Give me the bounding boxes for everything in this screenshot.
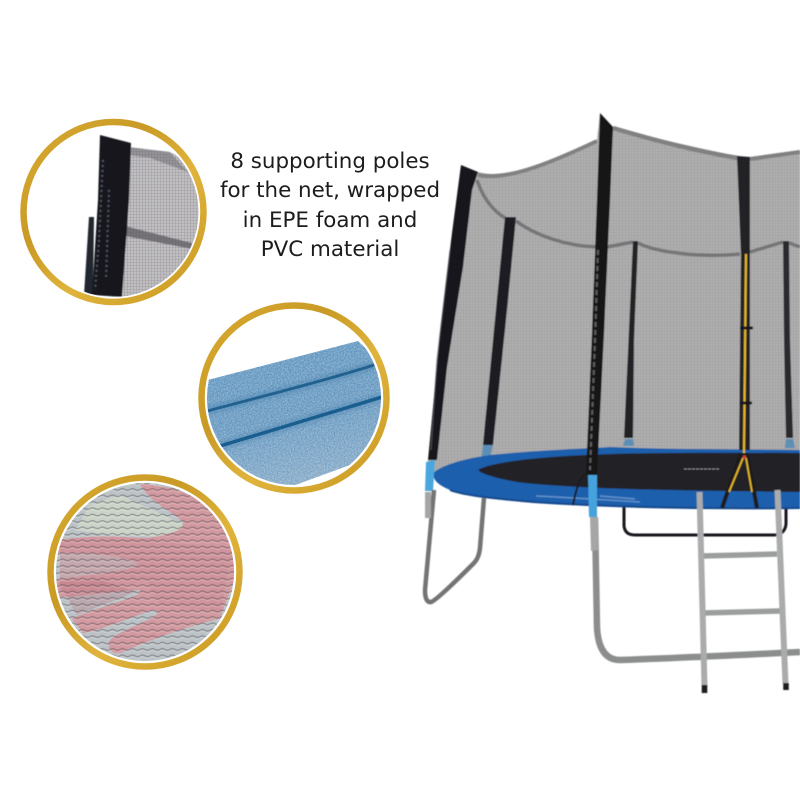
jump mat xyxy=(478,453,800,492)
ladder feet xyxy=(704,683,786,693)
caption text: in EPE foam and xyxy=(243,208,417,233)
left U leg xyxy=(425,490,484,602)
main pole cyan sleeve xyxy=(588,475,597,517)
hand photo xyxy=(50,480,240,665)
left leg socket xyxy=(425,492,431,518)
foam groove lower xyxy=(220,397,382,446)
caption text: for the net, wrapped xyxy=(220,178,440,203)
caption text: PVC material xyxy=(261,237,399,262)
yellow zip xyxy=(744,254,746,453)
net band lower centre xyxy=(607,242,633,247)
grey background xyxy=(50,480,240,665)
net mesh xyxy=(122,147,205,300)
net band lower left xyxy=(477,180,505,218)
ladder rung lower xyxy=(703,611,780,613)
photo circle: net pole close-up xyxy=(24,122,205,302)
dark net band middle xyxy=(125,226,192,249)
trampoline pad xyxy=(433,447,800,508)
rear thin pole centre xyxy=(624,241,638,438)
rear thin pole right xyxy=(783,241,793,438)
net band top centre xyxy=(613,128,738,158)
net band far right xyxy=(750,242,800,252)
photo circle: EPE foam close-up xyxy=(200,306,400,490)
pole and mesh photo xyxy=(84,135,205,300)
ladder rail left xyxy=(700,492,704,686)
main pole sheen xyxy=(590,250,598,470)
ladder rung upper xyxy=(702,554,777,556)
photo circle: hand behind net xyxy=(50,478,240,666)
red knot xyxy=(743,455,746,459)
net band top left xyxy=(478,141,597,176)
gold ring: hand photo xyxy=(50,478,240,666)
centre net door strap xyxy=(737,156,750,450)
foam body xyxy=(207,341,381,485)
gold ring: pole photo xyxy=(24,122,204,302)
caption text xyxy=(220,149,440,262)
pad highlights xyxy=(536,496,640,502)
net band lower right xyxy=(638,243,740,255)
foam texture xyxy=(207,341,381,485)
net weave over photo xyxy=(50,480,240,665)
pole sheen xyxy=(95,160,109,290)
net panel xyxy=(428,113,800,472)
back black frame bar xyxy=(624,506,786,535)
hand xyxy=(55,483,240,653)
ladder xyxy=(700,490,786,693)
zip clips xyxy=(740,328,753,403)
pole tie strap xyxy=(573,474,585,505)
rear pole sleeves xyxy=(481,439,795,463)
small rear pole xyxy=(84,217,94,295)
pad lower shadow xyxy=(450,490,800,508)
rear thin pole left xyxy=(483,217,516,445)
foam groove upper xyxy=(207,365,374,411)
door strap fork xyxy=(722,453,757,508)
main wrapped pole xyxy=(92,135,131,297)
caption text: 8 supporting poles xyxy=(230,149,430,174)
front left pole xyxy=(428,165,478,460)
front leg xyxy=(595,517,800,660)
front left cyan sleeve xyxy=(425,460,435,491)
gold ring: foam photo xyxy=(202,306,386,490)
front left pole sheen xyxy=(431,250,450,450)
pale patch xyxy=(75,495,185,537)
foam photo xyxy=(207,341,381,485)
trampoline photo xyxy=(425,113,800,693)
ladder rail right xyxy=(778,490,786,684)
front main pole xyxy=(586,113,613,475)
front leg socket xyxy=(590,517,598,551)
net band top right xyxy=(750,152,800,159)
yellow fork xyxy=(729,458,752,492)
dark net band top xyxy=(128,147,188,172)
groove shading xyxy=(207,365,382,446)
net band lower middle xyxy=(516,221,597,247)
mat logo xyxy=(684,468,720,470)
